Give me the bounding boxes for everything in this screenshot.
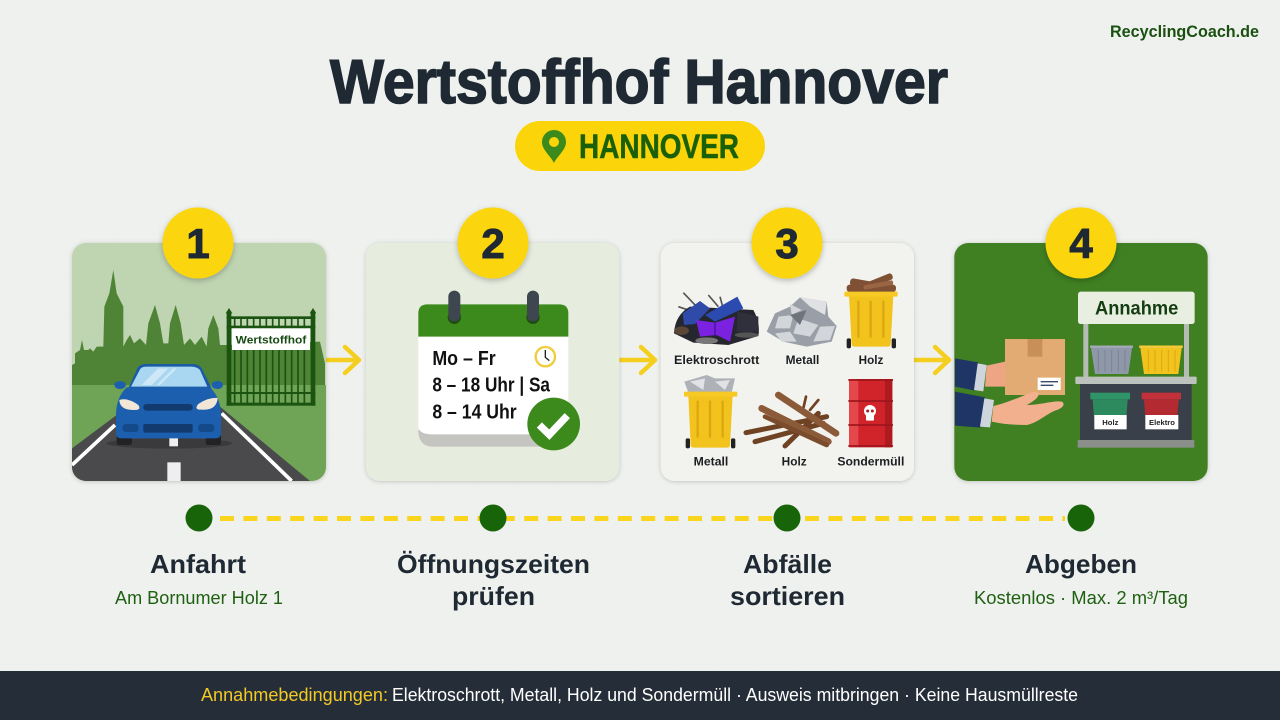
title: Wertstoffhof Hannover <box>330 48 948 117</box>
panel: step 3 sorting illustration: Sondermüll <box>837 455 904 469</box>
step 3 label: sortieren <box>730 581 845 611</box>
collection stand <box>1075 292 1197 448</box>
step 4 label: Abgeben <box>1025 549 1137 579</box>
step 4 label <box>974 549 1188 608</box>
step 3 label: Abfälle <box>743 549 832 579</box>
panel: step 3 sorting illustration <box>661 243 914 481</box>
location badge: HANNOVER <box>579 128 739 166</box>
Wertstoffhof gate: Wertstoffhof <box>236 334 307 346</box>
panel: step 2 Oeffnungszeiten illustration <box>366 243 619 481</box>
arrow: step 1 to 2 <box>325 347 359 373</box>
yellow bin with metal <box>684 375 737 448</box>
opening hours text: Mo – Fr <box>432 348 496 370</box>
panel: step 3 sorting illustration: Metall <box>694 455 728 469</box>
panel: step 3 sorting illustration: Holz <box>859 353 883 367</box>
road <box>72 407 310 481</box>
e-waste pile <box>674 293 759 345</box>
parcel <box>1005 339 1065 395</box>
step 2 label <box>397 549 590 611</box>
step 1 label: Am Bornumer Holz 1 <box>115 588 283 608</box>
brand label: RecyclingCoach.de <box>1110 22 1259 41</box>
location badge <box>515 121 765 171</box>
metal pile <box>767 297 837 347</box>
badge 3: 3 <box>775 220 799 267</box>
step 1 label <box>115 549 283 608</box>
blue car <box>107 364 232 481</box>
icon: clock <box>536 347 555 366</box>
Annahme sign: Annahme <box>1095 298 1178 319</box>
step 4 label: Kostenlos · Max. 2 m³/Tag <box>974 588 1188 608</box>
badge 4 <box>1046 208 1116 278</box>
collection stand: Elektro <box>1149 418 1175 427</box>
footer bar: Elektroschrott, Metall, Holz und Sondermüll · Ausweis mitbringen · Keine Hausmüllreste <box>392 685 1078 705</box>
panel: step 1 Anfahrt illustration <box>72 243 326 482</box>
badge 1 <box>162 208 234 278</box>
step 1 label: Anfahrt <box>150 549 246 579</box>
hands handing over parcel <box>955 358 1064 428</box>
footer bar: Annahmebedingungen: <box>201 685 388 705</box>
Wertstoffhof gate <box>226 308 316 406</box>
yellow bin with wood <box>844 273 898 348</box>
timeline <box>186 504 1094 532</box>
badge 1: 1 <box>186 220 210 267</box>
badge 4: 4 <box>1069 220 1093 267</box>
badge 2 <box>458 208 528 278</box>
opening hours text: 8 – 18 Uhr | Sa <box>432 375 551 397</box>
step 3 label <box>730 549 845 611</box>
city skyline <box>72 270 325 387</box>
Annahme sign <box>1078 292 1195 324</box>
panel: step 3 sorting illustration: Metall <box>786 353 819 367</box>
collection stand: Holz <box>1102 418 1119 427</box>
badge 3 <box>752 208 822 278</box>
step 2 label: Öffnungszeiten <box>397 549 590 579</box>
panel: step 3 sorting illustration: Holz <box>782 455 807 469</box>
calendar <box>418 291 580 450</box>
wood pile <box>746 395 836 446</box>
arrow: step 2 to 3 <box>620 347 655 373</box>
icon: map pin <box>542 130 566 163</box>
arrow: step 3 to 4 <box>915 347 949 373</box>
badge 2: 2 <box>481 220 505 267</box>
panel: step 4 Abgeben illustration <box>954 243 1208 481</box>
icon: check mark <box>527 398 580 450</box>
meadow <box>72 385 326 482</box>
opening hours text <box>432 348 551 423</box>
opening hours text: 8 – 14 Uhr <box>432 401 517 423</box>
red hazardous waste barrel <box>848 379 893 447</box>
step 2 label: prüfen <box>452 581 535 611</box>
footer bar <box>0 671 1280 720</box>
panel: step 3 sorting illustration: Elektroschrott <box>674 353 759 367</box>
